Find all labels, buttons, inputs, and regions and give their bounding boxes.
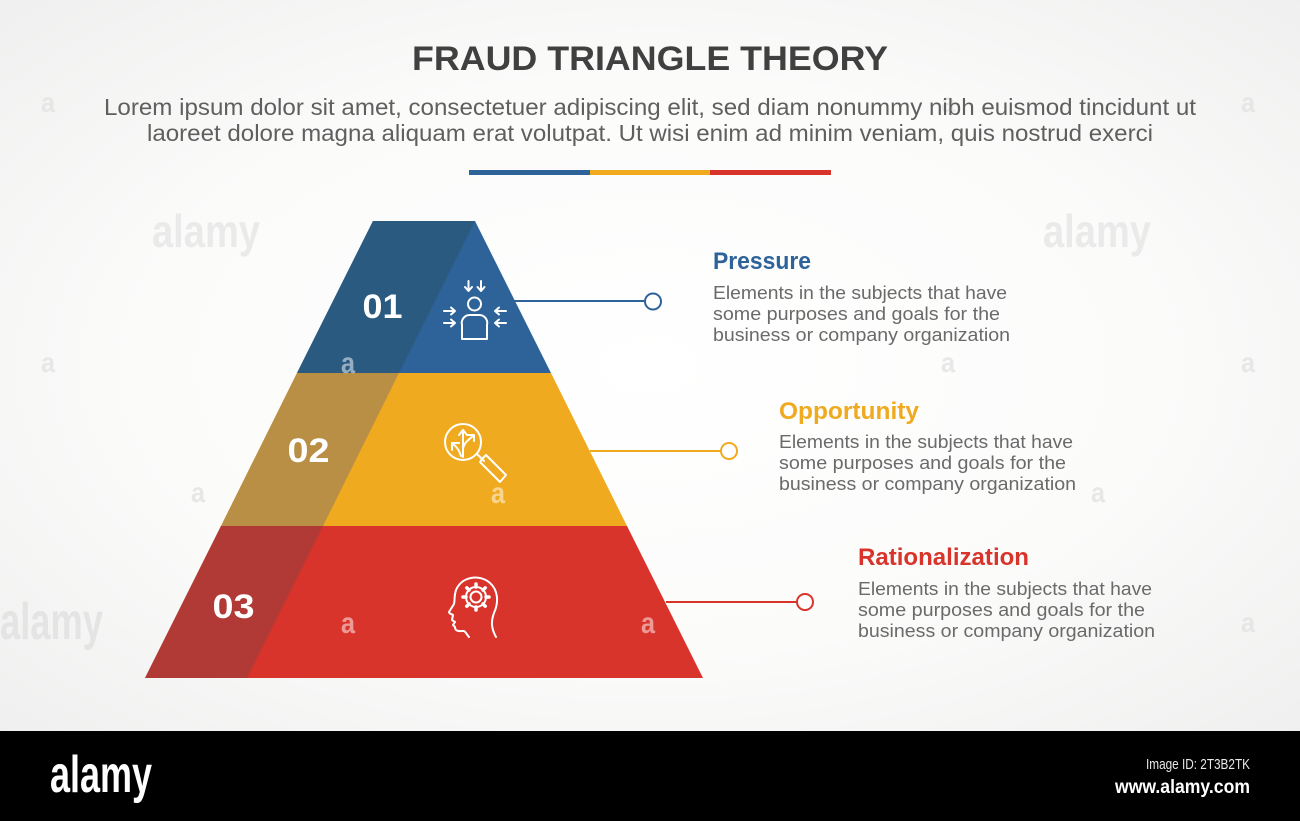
footer: alamy logo: alamy xyxy=(50,746,152,804)
text block: opportunity: business or company organization xyxy=(779,474,1076,494)
text block: rationalization: business or company organization xyxy=(858,621,1155,641)
text block: opportunity xyxy=(779,398,1076,494)
text block: opportunity: some purposes and goals for the xyxy=(779,453,1066,473)
footer: website: www.alamy.com xyxy=(1114,777,1250,798)
text block: pressure: Elements in the subjects that have xyxy=(713,283,1007,303)
subtitle text: Lorem ipsum dolor sit amet, consectetuer adipiscing elit, sed diam nonummy nibh euismod tincidunt ut xyxy=(104,94,1197,120)
faint background watermark: alamy xyxy=(152,205,260,257)
faint background watermark: alamy xyxy=(1043,205,1151,257)
faint background watermark: a xyxy=(1241,87,1255,118)
watermark marks over pyramid: a xyxy=(491,477,505,510)
faint background watermark: a xyxy=(941,347,955,378)
level 2: opportunity: 02 xyxy=(288,432,330,470)
icon: head with gear xyxy=(449,578,497,637)
subtitle text: laoreet dolore magna aliquam erat volutpat. Ut wisi enim ad minim veniam, quis nostrud exerci xyxy=(147,120,1153,146)
icon: magnifier with arrows xyxy=(445,424,506,482)
text block: rationalization: Elements in the subjects that have xyxy=(858,579,1152,599)
faint background watermark: a xyxy=(1241,607,1255,638)
text block: pressure: Pressure xyxy=(713,248,811,275)
level 3: rationalization xyxy=(145,526,703,678)
level 2: opportunity xyxy=(221,373,627,526)
faint background watermark: a xyxy=(1241,347,1255,378)
faint background watermark: alamy xyxy=(0,593,103,651)
faint background watermark: a xyxy=(41,347,55,378)
icon: person under pressure xyxy=(444,281,506,339)
connector: opportunity xyxy=(590,443,737,459)
text block: pressure: business or company organization xyxy=(713,325,1010,345)
text block: opportunity: Opportunity xyxy=(779,398,920,425)
faint background watermark: a xyxy=(1091,477,1105,508)
faint background watermark: a xyxy=(941,87,955,118)
title: FRAUD TRIANGLE THEORY xyxy=(412,40,888,78)
level 1: pressure xyxy=(297,221,551,373)
faint background watermark xyxy=(0,87,1255,651)
faint background watermark: a xyxy=(41,87,55,118)
text block: rationalization: Rationalization xyxy=(858,544,1029,571)
text block: rationalization xyxy=(858,544,1155,641)
watermark marks over pyramid: a xyxy=(641,607,655,640)
watermark marks over pyramid xyxy=(341,347,655,640)
level 3: rationalization: 03 xyxy=(212,588,254,626)
level 1: pressure: 01 xyxy=(362,288,402,326)
footer: image id: Image ID: 2T3B2TK xyxy=(1146,756,1250,773)
text block: rationalization: some purposes and goals for the xyxy=(858,600,1145,620)
watermark marks over pyramid: a xyxy=(341,347,355,380)
watermark marks over pyramid: a xyxy=(341,607,355,640)
connector: rationalization xyxy=(666,594,813,610)
text block: pressure xyxy=(713,248,1010,345)
text block: pressure: some purposes and goals for the xyxy=(713,304,1000,324)
tricolor divider xyxy=(469,170,831,175)
subtitle text xyxy=(104,94,1197,146)
faint background watermark: a xyxy=(191,477,205,508)
connector: pressure xyxy=(514,294,661,310)
pyramid xyxy=(145,221,703,678)
text block: opportunity: Elements in the subjects that have xyxy=(779,432,1073,452)
